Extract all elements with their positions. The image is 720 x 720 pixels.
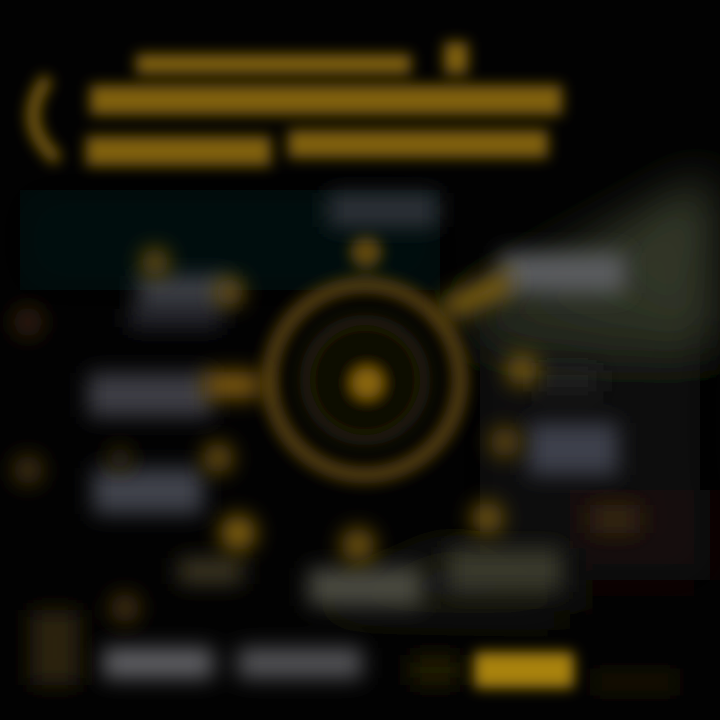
callout: gold button: [474, 652, 574, 688]
landscape panel: [20, 175, 720, 615]
top node: [350, 236, 382, 268]
text blocks: grey: [88, 193, 625, 678]
central ring diagram: [270, 236, 460, 475]
center node: [352, 368, 382, 398]
title: [86, 42, 562, 166]
icon: crescent: [33, 78, 58, 160]
gold icons: [13, 248, 680, 689]
inner ring: [305, 320, 425, 440]
outer ring: [270, 285, 460, 475]
